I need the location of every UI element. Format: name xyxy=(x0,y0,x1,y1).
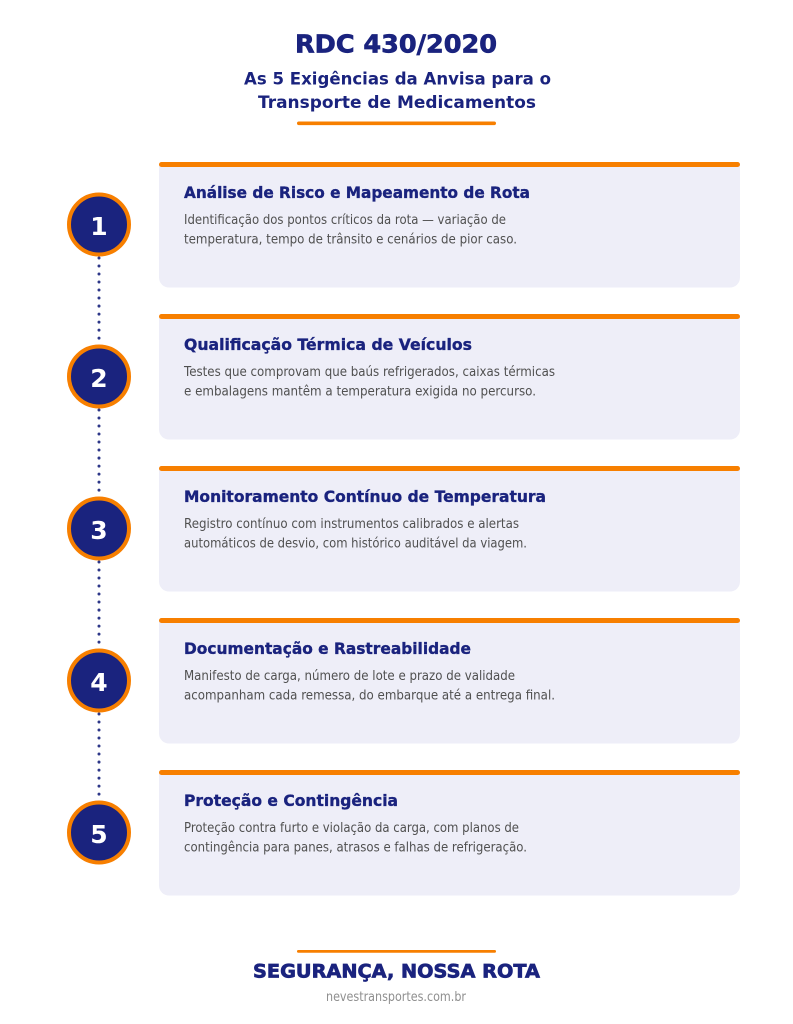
step 4 xyxy=(69,618,740,744)
slogan: SEGURANÇA, NOSSA ROTA xyxy=(253,962,541,982)
header xyxy=(244,30,551,125)
heading 3: Monitoramento Contínuo de Temperatura xyxy=(184,487,546,506)
subtitle: As 5 Exigências da Anvisa para o xyxy=(244,70,551,90)
text 3: automáticos de desvio, com histórico auditável da viagem. xyxy=(184,536,527,552)
footer xyxy=(253,950,541,1005)
badge 1: 1 xyxy=(90,212,108,241)
heading 2: Qualificação Térmica de Veículos xyxy=(184,335,472,354)
step 3 xyxy=(69,466,740,592)
text 2 xyxy=(183,364,555,400)
text 4: Manifesto de carga, número de lote e prazo de validade xyxy=(184,668,515,684)
panel: step 1 card xyxy=(159,162,740,288)
heading 5: Proteção e Contingência xyxy=(184,791,398,810)
heading 1: Análise de Risco e Mapeamento de Rota xyxy=(184,183,530,202)
step 2 xyxy=(69,314,740,440)
panel: step 5 card xyxy=(159,770,740,896)
panel: step 2 card xyxy=(159,314,740,440)
timeline connector: dotted lines xyxy=(98,258,100,800)
text 3: Registro contínuo com instrumentos calibrados e alertas xyxy=(184,516,519,532)
footer accent bar xyxy=(297,950,496,953)
badge 3 xyxy=(69,498,129,558)
badge 2 xyxy=(69,346,129,406)
text 2: e embalagens mantêm a temperatura exigida no percurso. xyxy=(184,384,536,400)
badge 1 xyxy=(69,194,129,254)
text 5: Proteção contra furto e violação da carga, com planos de xyxy=(184,821,519,836)
step 5 xyxy=(69,770,740,896)
subtitle xyxy=(244,70,551,113)
badge 3: 3 xyxy=(90,516,108,545)
badge 4 xyxy=(69,650,129,710)
badge 5: 5 xyxy=(90,820,108,849)
badge 4: 4 xyxy=(90,668,108,697)
text 3 xyxy=(184,516,527,552)
text 4 xyxy=(184,668,555,704)
text 1 xyxy=(184,212,517,248)
text 1: temperatura, tempo de trânsito e cenários de pior caso. xyxy=(184,232,517,248)
website: nevestransportes.com.br xyxy=(326,990,467,1005)
header accent bar xyxy=(297,122,496,125)
subtitle: Transporte de Medicamentos xyxy=(258,93,536,113)
text 4: acompanham cada remessa, do embarque até a entrega final. xyxy=(184,688,555,704)
panel: step 3 card xyxy=(159,466,740,592)
step 1 xyxy=(69,162,740,288)
text 2: Testes que comprovam que baús refrigerados, caixas térmicas xyxy=(183,364,555,380)
text 5: contingência para panes, atrasos e falhas de refrigeração. xyxy=(184,840,527,856)
badge 2: 2 xyxy=(90,364,108,393)
title: RDC 430/2020 xyxy=(295,30,497,58)
text 5 xyxy=(184,821,527,856)
badge 5 xyxy=(69,802,129,862)
text 1: Identificação dos pontos críticos da rota — variação de xyxy=(184,212,506,228)
heading 4: Documentação e Rastreabilidade xyxy=(184,639,471,658)
panel: step 4 card xyxy=(159,618,740,744)
